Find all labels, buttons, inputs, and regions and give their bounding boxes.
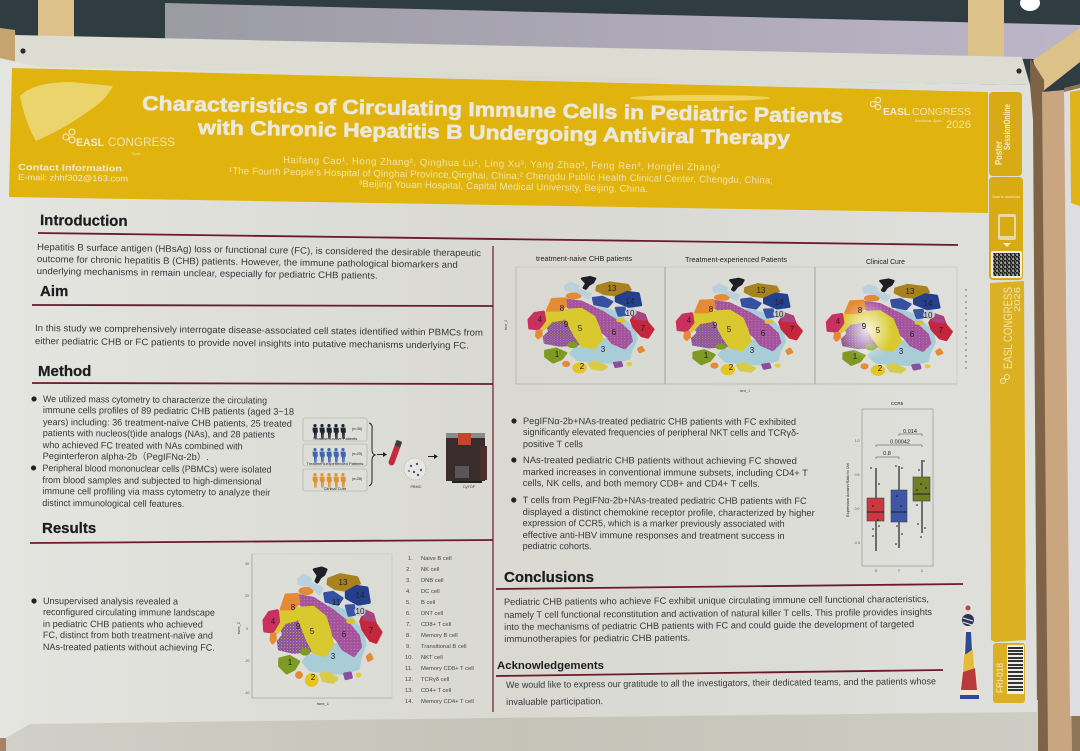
label: CyTOF: CyTOF (463, 485, 476, 489)
text: results right bullets: NAs-treated pediatric CHB patients without achieving FC showed (523, 455, 797, 466)
panel: treatment-experienced: 1 (704, 351, 709, 360)
text: method bullets: years) including: 36 treatment-naïve CHB patients, 25 treated (43, 417, 292, 429)
panel: treatment-experienced: 13 (757, 286, 766, 295)
text: introduction: underlying mechanisms in remain unclear, especially for pediatric CHB patients. (37, 266, 378, 281)
panel: treatment-experienced: 8 (709, 305, 714, 314)
text: results bullet: Unsupervised analysis revealed a (43, 596, 179, 606)
legend: cell types: Memory B cell (421, 633, 458, 639)
screw right (1016, 68, 1022, 74)
authors: Haifang Cao¹, Hong Zhang², Qinghua Lu¹, Ling Xu³, Yang Zhao³, Feng Ren³, Hongfei Zhang² (283, 155, 721, 174)
legend: cell types: DNB cell (421, 578, 444, 584)
legend: cell types: 9. (406, 644, 411, 650)
panel: treatment-naive: 10 (626, 309, 635, 318)
EASL logo right (870, 97, 971, 131)
legend: cell types: 5. (406, 600, 411, 606)
text: results right bullets: effective anti-HBV immune responses and treatment success in (523, 530, 785, 541)
panel: clinical cure: 14 (924, 299, 933, 308)
panel: clinical cure: 4 (836, 317, 841, 326)
panel: clinical cure: 1 (853, 352, 858, 361)
lower left wood (0, 738, 6, 751)
panel: treatment-naive: 3 (601, 345, 606, 354)
text: conclusions: immunotherapies for pediatric CHB patients. (504, 633, 690, 644)
panel: clinical cure: 6 (910, 330, 915, 339)
legend: cell types: TCRγδ cell (421, 677, 449, 683)
EASL logo right: EASL (883, 107, 910, 118)
icon: decorative tower (960, 606, 979, 699)
text: results right bullets: T cells from PegIFNα-2b+NAs-treated pediatric CHB patients with FC (523, 495, 807, 506)
axis labels: tsne_2 (504, 320, 508, 330)
rule: results (30, 540, 493, 543)
text: results right bullets: PegIFNα-2b+NAs-treated pediatric CHB patients with FC exhibited (523, 416, 796, 427)
cohort: treatment-naive: Treatment-naive Patients (313, 436, 357, 441)
EASL logo right: CONGRESS (912, 106, 971, 118)
cohort: treatment-naive: (n=36) (352, 427, 362, 431)
icon: blood tube (388, 440, 402, 466)
contact information: Contact Information (18, 162, 122, 173)
text: conclusions: Pediatric CHB patients who achieve FC exhibit unique circulating immune cell functional characteristics, (504, 594, 929, 607)
chart: main tSNE: 4 (271, 617, 276, 626)
strip: barcode FRI-018: FRI-018 (995, 663, 1005, 693)
contact information (18, 162, 128, 184)
text: results right bullets: cells, NK cells, and both memory CD8+ and CD4+ T cells. (523, 478, 760, 489)
cohort: clinical cure (303, 469, 367, 491)
box: blue group (891, 465, 907, 548)
panel titles (536, 254, 905, 266)
heading: Method: Method (38, 363, 91, 380)
strip: ePoster online: SessionOnline (1002, 104, 1012, 150)
text: method bullets: distinct immunological cell features. (42, 498, 184, 509)
p values: 0.014 (903, 429, 917, 435)
chart: main tSNE: 6 (342, 630, 347, 639)
chart: main tSNE (236, 554, 392, 706)
panel: treatment-naive: 9 (564, 320, 569, 329)
panel: clinical cure: 8 (858, 306, 863, 315)
legend: cell types: 10. (405, 655, 413, 661)
heading: Introduction: Introduction (40, 212, 128, 230)
chart: main tSNE: 14 (356, 591, 365, 600)
text: method bullets: who achieved FC treated with NAs combined with (42, 440, 243, 451)
cohort: clinical cure: Clinical Cure (324, 486, 347, 491)
top board (15, 35, 1030, 85)
panel: treatment-experienced: 10 (775, 310, 784, 319)
side strip (989, 92, 1026, 703)
header banner (9, 68, 988, 213)
text: aim (35, 323, 483, 351)
panel titles: Treatment-experienced Patients (685, 255, 787, 264)
EASL logo left: CONGRESS (108, 137, 175, 149)
text: conclusions: namely T cell functional reconstitution and activation of natural killer T cells. This profile provides insights (504, 607, 932, 620)
text: acknowledgements: We would like to express our gratitude to all the investigators, their dedicated teams, and the patients whose (506, 676, 936, 690)
cohort: treatment-experienced: (n=25) (352, 452, 362, 456)
panel: clinical cure: 10 (924, 311, 933, 320)
heading: Aim: Aim (40, 283, 68, 300)
y axis: 0.5 (855, 473, 859, 477)
panel legend (965, 289, 967, 369)
p values (883, 429, 917, 457)
authors (229, 155, 773, 195)
arrow to tube (377, 452, 387, 457)
EASL logo right: 2026 (946, 119, 971, 131)
strip: ePoster online: Poster (994, 141, 1005, 165)
chart: main tSNE: -20 (244, 659, 250, 663)
title: with Chronic Hepatitis B Undergoing Antiviral Therapy (197, 117, 791, 150)
text: results right bullets: positive T cells (523, 439, 583, 449)
legend: cell types: DNT cell (421, 611, 443, 617)
title (142, 93, 843, 150)
rule: method (32, 383, 493, 384)
panel: treatment-experienced: 9 (713, 321, 718, 330)
chart: main tSNE: tsne_2 (236, 621, 241, 634)
text: conclusions (504, 594, 933, 644)
rule: conclusions (496, 584, 963, 589)
p values: 0.8 (883, 451, 891, 457)
heading: Conclusions: Conclusions (504, 569, 594, 586)
text: aim: either pediatric CHB or FC patients to provide novel insights into putative mechanisms underlying FC. (35, 336, 469, 351)
text: results bullet (31, 596, 215, 653)
text: acknowledgements: invaluable participation. (506, 696, 603, 707)
text: method bullets: from blood samples and subjected to high-dimensional (42, 475, 261, 487)
screw left (20, 48, 26, 54)
rule: introduction (38, 233, 958, 245)
text: results right bullets (511, 416, 815, 552)
text: results right bullets: displayed a distinct chemokine receptor profile, characterized by higher (523, 507, 815, 518)
chart: main tSNE: 3 (331, 652, 336, 661)
contact information: E-mail: zhhf302@163.com (18, 172, 128, 184)
lavender back wall banner (165, 3, 1080, 60)
panel: treatment-naive: 13 (608, 284, 617, 293)
x tick labels: G (875, 569, 878, 573)
EASL logo right: Barcelona, Spain (915, 119, 942, 123)
authors: ¹The Fourth People's Hospital of Qinghai Province,Qinghai, China;² Chengdu Public Health Clinical Center, Chengdu, China; (229, 166, 773, 186)
chart: main tSNE: 5 (310, 627, 315, 636)
panel: clinical cure: 5 (876, 326, 881, 335)
strip: EASL congress (990, 281, 1026, 642)
strip: QR download: Scan to download (992, 195, 1020, 199)
chart title: CCR5 (891, 401, 904, 406)
label: PBMC: PBMC (411, 485, 422, 489)
legend: cell types: CD4+ T cell (421, 688, 451, 694)
cohort: treatment-experienced: Treatment-experienced Patients (307, 461, 363, 466)
chart: CCR5 box plot (846, 401, 933, 573)
legend: cell types: NKT cell (421, 655, 443, 661)
panel: treatment-naive: 7 (641, 324, 646, 333)
brackets (876, 434, 922, 459)
panel: treatment-naive: 1 (555, 350, 560, 359)
panel: treatment-experienced: 5 (727, 325, 732, 334)
text: method bullets: Peripheral blood mononuclear cells (PBMCs) were isolated (43, 463, 272, 475)
chart: main tSNE: 9 (296, 622, 301, 631)
chart: main tSNE: -40 (244, 691, 250, 695)
legend: cell types: 13. (405, 688, 413, 694)
panel: treatment-experienced: 14 (775, 298, 784, 307)
chart: main tSNE: 20 (245, 594, 249, 598)
chart: main tSNE: 11 (332, 598, 341, 607)
panel: clinical cure: 7 (939, 326, 944, 335)
axis labels: tsne_1 (740, 389, 750, 393)
legend: cell types (405, 556, 474, 705)
text: conclusions: into the mechanisms of pediatric CHB patients with FC and could guide the development of targeted (504, 619, 914, 632)
text: method bullets: immune cell profiling via mass cytometry to analyze their (42, 486, 270, 498)
method workflow diagram (303, 418, 487, 491)
panel: treatment-experienced: 3 (750, 346, 755, 355)
y axis (846, 439, 860, 545)
EASL logo left (63, 129, 175, 156)
heading: Acknowledgements: Acknowledgements (497, 660, 604, 672)
text: results bullet: in pediatric CHB patients who achieved (43, 619, 203, 630)
title: Characteristics of Circulating Immune Cells in Pediatric Patients (142, 93, 843, 128)
text: method bullets (31, 394, 294, 510)
legend: cell types: 11. (405, 666, 413, 672)
chart: main tSNE: 40 (245, 562, 249, 566)
legend: cell types: B cell (421, 600, 435, 606)
neighbouring poster (1064, 88, 1080, 716)
p values: 0.00042 (890, 440, 910, 446)
panel: clinical cure: 2 (878, 364, 883, 373)
strip: EASL congress: 2026 (1013, 286, 1022, 312)
icon: liver (20, 82, 113, 141)
legend: cell types: DC cell (421, 589, 440, 595)
cohort: treatment-experienced (303, 444, 367, 466)
y axis: -0.5 (854, 541, 860, 545)
cohort: clinical cure: (n=28) (352, 477, 362, 481)
box: red group (867, 467, 884, 551)
text: results right bullets: pediatric cohorts. (523, 541, 592, 551)
cohort: treatment-naive (303, 418, 367, 441)
panel: treatment-naive: 2 (580, 362, 585, 371)
legend: cell types: 8. (406, 633, 411, 639)
x tick labels: T (898, 569, 901, 573)
wooden posts (0, 0, 1080, 92)
legend: cell types: 6. (406, 611, 411, 617)
chart: main tSNE: 8 (291, 603, 296, 612)
brace (369, 423, 375, 486)
icon: CyTOF machine (446, 433, 487, 483)
text: acknowledgements (506, 676, 936, 707)
strip: QR download (989, 177, 1023, 280)
panel: treatment-experienced: 2 (729, 363, 734, 372)
rule: aim (32, 305, 493, 306)
chart: main tSNE: 2 (311, 673, 316, 682)
EASL logo left: EASL (76, 137, 104, 149)
legend: cell types: NK cell (421, 567, 439, 573)
legend: cell types: CD8+ T cell (421, 622, 451, 628)
authors: ³Beijing Youan Hospital, Capital Medical University, Beijing, China. (359, 179, 648, 195)
panel frames (516, 267, 957, 384)
text: results right bullets: significantly elevated frequencies of peripheral NKT cells and TCRγδ- (523, 427, 799, 438)
text: method bullets: We utilized mass cytometry to characterize the circulating (43, 394, 267, 406)
x tick labels: C (921, 569, 924, 573)
box: olive group (913, 460, 930, 538)
strip: EASL congress: EASL CONGRESS (1001, 287, 1015, 369)
panel: treatment-naive: 5 (578, 324, 583, 333)
y axis: 0.0 (855, 507, 859, 511)
chart: tSNE three panels (504, 254, 967, 393)
text: results bullet: reconfigured circulating immune landscape (43, 607, 215, 618)
legend: cell types: 3. (406, 578, 411, 584)
chart: main tSNE: tsne_1 (317, 701, 330, 706)
icon: PBMC dish (404, 458, 426, 480)
legend: cell types: 1. (408, 556, 413, 562)
panel: treatment-experienced: 6 (761, 329, 766, 338)
chart: main tSNE: 0 (246, 627, 248, 631)
text: results right bullets: expression of CCR5, which is a marker previously associated with (523, 518, 785, 529)
text: method bullets: Peginterferon alpha-2b（PegIFNα-2b）. (43, 451, 209, 462)
panel: treatment-naive: 14 (626, 297, 635, 306)
y axis: Expression Arcsinh Ratio to Ctrl (846, 463, 850, 517)
strip: ePoster online (989, 92, 1022, 176)
wood frame right (1030, 58, 1080, 751)
x tick labels (875, 569, 924, 573)
frame (862, 409, 933, 566)
sheen on banner (630, 95, 770, 101)
chart: main tSNE: 10 (356, 607, 365, 616)
panel: treatment-experienced: 4 (687, 316, 692, 325)
arrow to cytometer (428, 454, 438, 459)
rule: acknowledgements (496, 670, 943, 676)
chart: main tSNE: 13 (339, 578, 348, 587)
text: results bullet: FC, distinct from both treatment-naïve and (43, 630, 213, 641)
panel: treatment-naive: 4 (538, 315, 543, 324)
panel: clinical cure: 13 (906, 287, 915, 296)
ceiling light (1020, 0, 1040, 11)
text: results bullet: NAs-treated patients without achieving FC. (43, 642, 215, 653)
EASL logo left: Spain (132, 152, 141, 156)
panel: clinical cure (827, 280, 951, 375)
panel: treatment-naive: 8 (560, 304, 565, 313)
legend: cell types: Transitional B cell (421, 644, 467, 650)
panel: treatment-experienced: 7 (790, 325, 795, 334)
text: introduction: outcome for chronic hepatitis B (CHB) patients. However, the immune pathological biomarkers and (37, 254, 458, 270)
text: aim: In this study we comprehensively interrogate disease-associated cell states identified within PBMCs from (35, 323, 483, 338)
chart: main tSNE: 1 (288, 658, 293, 667)
legend: cell types: Memory CD4+ T cell (421, 699, 474, 705)
panel: clinical cure: 9 (862, 322, 867, 331)
text: method bullets: immune cells profiles of 89 pediatric CHB patients (aged 3~18 (43, 405, 294, 417)
y axis: 1.0 (855, 439, 859, 443)
panel: treatment-naive (529, 277, 653, 372)
legend: cell types: Naive B cell (421, 556, 452, 562)
legend: cell types: 4. (406, 589, 411, 595)
panel: treatment-naive: 6 (612, 328, 617, 337)
text: introduction (37, 242, 481, 282)
legend: cell types: Memory CD8+ T cell (421, 666, 474, 672)
panel titles: Clinical Cure (866, 257, 905, 266)
panel: clinical cure: 3 (899, 347, 904, 356)
floor area below poster (0, 700, 1038, 751)
panel: treatment-experienced (677, 279, 801, 374)
legend: cell types: 14. (405, 699, 413, 705)
text: introduction: Hepatitis B surface antigen (HBsAg) loss or functional cure (FC), is considered the desirable therapeutic (37, 242, 481, 258)
axis labels (504, 320, 750, 393)
panel titles: treatment-naive CHB patients (536, 254, 632, 263)
text: method bullets: patients with nucleos(t)ide analogs (NAs), and 28 patients (43, 428, 275, 440)
heading: Results: Results (42, 520, 96, 537)
column divider (492, 246, 494, 712)
strip: barcode FRI-018 (993, 643, 1025, 703)
legend: cell types: 2. (406, 567, 411, 573)
chart: main tSNE: 7 (369, 626, 374, 635)
legend: cell types: 12. (405, 677, 413, 683)
text: results right bullets: marked increases in conventional immune subsets, including CD4+ T (523, 467, 808, 478)
legend: cell types: 7. (406, 622, 411, 628)
